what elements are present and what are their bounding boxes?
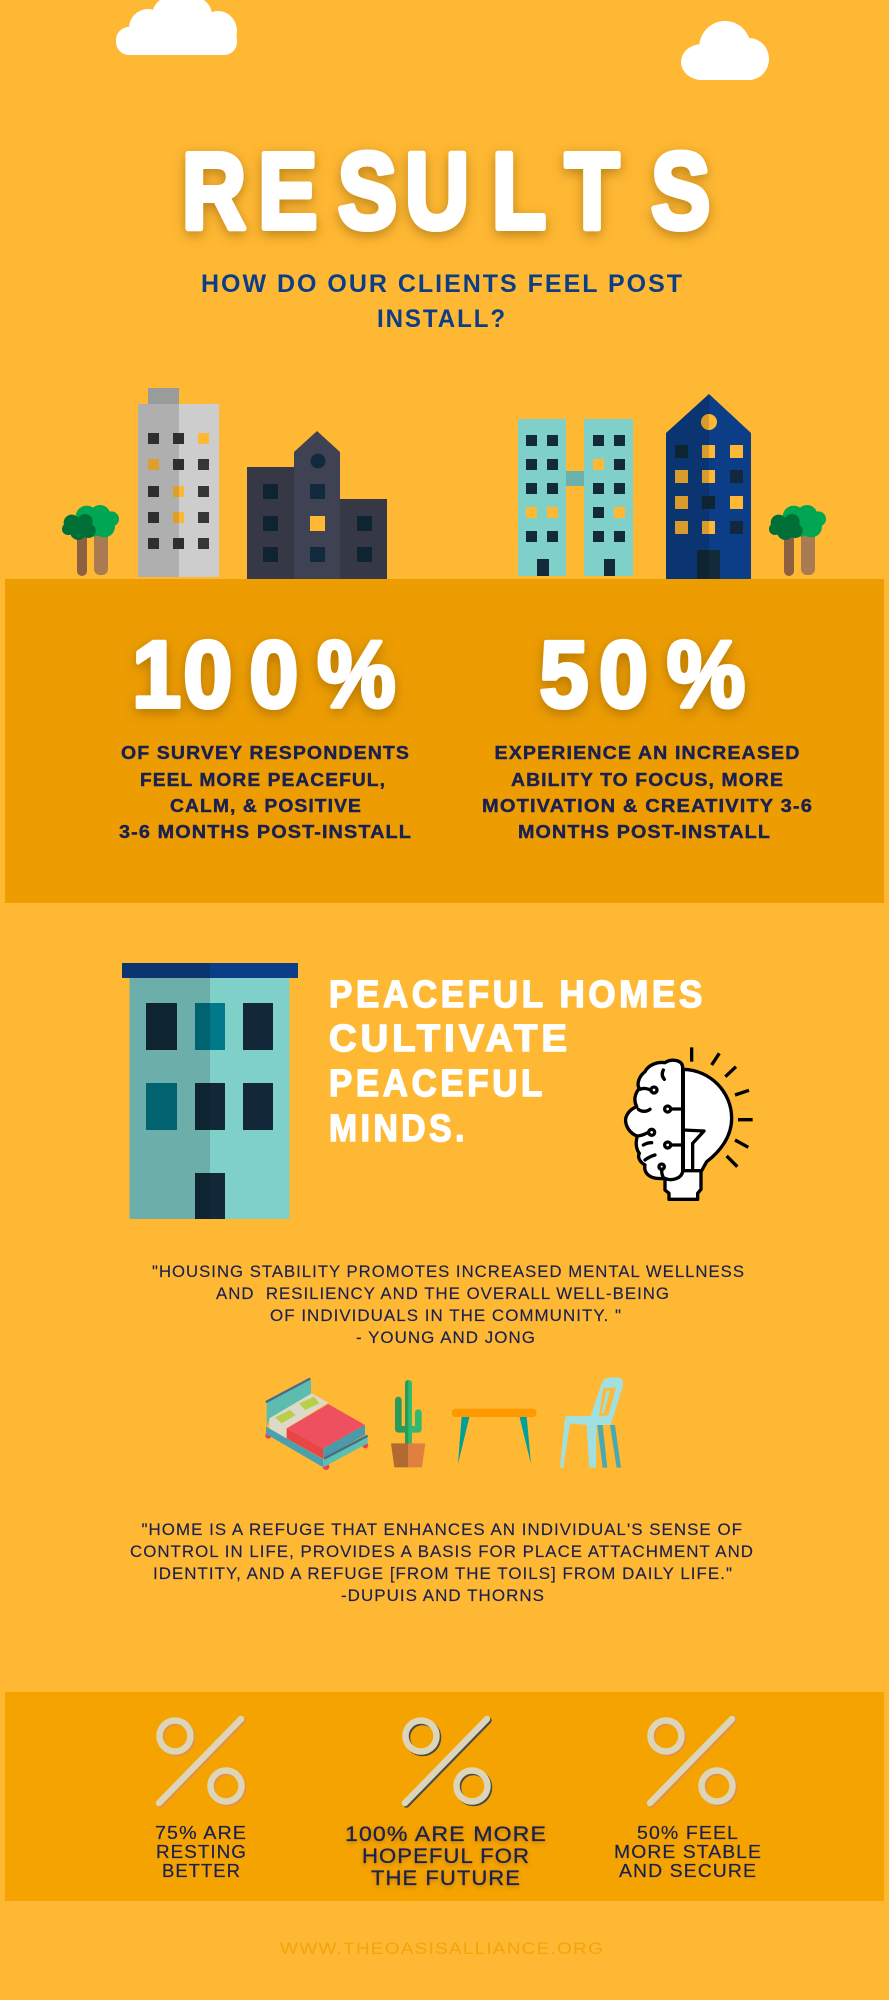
subtitle: INSTALL? <box>377 305 507 333</box>
icon: dark building <box>247 431 387 579</box>
text: 75% resting better: BETTER <box>162 1861 241 1881</box>
text: 100% description: FEEL MORE PEACEFUL, <box>140 770 386 790</box>
text: quote Dupuis and Thorns: IDENTITY, AND A REFUGE [FROM THE TOILS] FROM DAILY LIFE." <box>153 1565 733 1583</box>
heading: peaceful homes: PEACEFUL HOMES <box>329 974 706 1016</box>
heading: peaceful homes <box>329 974 706 1150</box>
text: 50% description: MOTIVATION & CREATIVITY 3-6 <box>482 796 813 816</box>
text: 50% more stable: MORE STABLE <box>614 1842 762 1862</box>
icon: percent middle <box>405 1719 489 1804</box>
text: 100% more hopeful: 100% ARE MORE <box>345 1823 547 1846</box>
text: 50% description <box>482 743 813 842</box>
icon: twin teal towers <box>518 419 633 576</box>
text: 50% description: ABILITY TO FOCUS, MORE <box>511 770 784 790</box>
statistic: 100%: 100% <box>132 622 396 728</box>
icon: trees right <box>769 505 826 576</box>
text: quote Young and Jong: OF INDIVIDUALS IN THE COMMUNITY. " <box>270 1307 622 1325</box>
icon: teal apartment building <box>122 963 298 1219</box>
text: 100% more hopeful: THE FUTURE <box>371 1867 521 1890</box>
text: 100% more hopeful <box>345 1823 547 1890</box>
text: quote Young and Jong <box>152 1263 745 1347</box>
icon: cloud right <box>681 21 769 80</box>
heading: peaceful homes: CULTIVATE <box>329 1018 571 1060</box>
text: quote Young and Jong: - YOUNG AND JONG <box>356 1329 536 1347</box>
text: 100% more hopeful: HOPEFUL FOR <box>362 1845 530 1868</box>
text: 50% more stable: AND SECURE <box>619 1861 757 1881</box>
icon: percent left <box>159 1719 243 1804</box>
subtitle: HOW DO OUR CLIENTS FEEL POST <box>201 270 684 298</box>
panel: key statistics <box>5 579 884 903</box>
text: quote Young and Jong: AND RESILIENCY AND THE OVERALL WELL-BEING <box>216 1285 670 1303</box>
text: 50% more stable <box>614 1823 762 1881</box>
icon: percent right <box>650 1719 734 1804</box>
text: 100% description <box>119 743 412 842</box>
icon: bed <box>265 1378 368 1470</box>
heading: peaceful homes: PEACEFUL <box>329 1063 546 1105</box>
icon: cactus <box>391 1380 425 1467</box>
text: 100% description: CALM, & POSITIVE <box>170 796 362 816</box>
title: RESULTS <box>182 131 710 251</box>
text: website footer: WWW.THEOASISALLIANCE.ORG <box>280 1939 604 1958</box>
icon: chair <box>560 1377 623 1468</box>
icon: cloud left <box>116 0 237 55</box>
icon: brain light bulb <box>626 1047 753 1199</box>
icon: table <box>452 1409 537 1464</box>
panel: outcome percentages <box>5 1692 884 1901</box>
text: 50% description: MONTHS POST-INSTALL <box>518 822 771 842</box>
heading: peaceful homes: MINDS. <box>329 1108 468 1150</box>
text: 75% resting better: 75% ARE <box>155 1823 247 1843</box>
icon: trees left <box>62 505 119 576</box>
text: quote Dupuis and Thorns: -DUPUIS AND THORNS <box>341 1587 545 1605</box>
icon: grey tower building <box>138 388 219 577</box>
text: 75% resting better <box>155 1823 247 1881</box>
text: quote Dupuis and Thorns: "HOME IS A REFUGE THAT ENHANCES AN INDIVIDUAL'S SENSE OF <box>142 1521 743 1539</box>
text: quote Dupuis and Thorns <box>130 1521 754 1605</box>
statistic: 50%: 50% <box>539 622 745 728</box>
text: 100% description: 3-6 MONTHS POST-INSTALL <box>119 822 412 842</box>
subtitle <box>201 270 684 333</box>
text: 75% resting better: RESTING <box>156 1842 247 1862</box>
text: 50% more stable: 50% FEEL <box>637 1823 739 1843</box>
text: 100% description: OF SURVEY RESPONDENTS <box>121 743 410 763</box>
icon: navy building <box>666 394 751 579</box>
text: 50% description: EXPERIENCE AN INCREASED <box>494 743 800 763</box>
text: quote Dupuis and Thorns: CONTROL IN LIFE, PROVIDES A BASIS FOR PLACE ATTACHMENT AND <box>130 1543 754 1561</box>
text: quote Young and Jong: "HOUSING STABILITY PROMOTES INCREASED MENTAL WELLNESS <box>152 1263 745 1281</box>
